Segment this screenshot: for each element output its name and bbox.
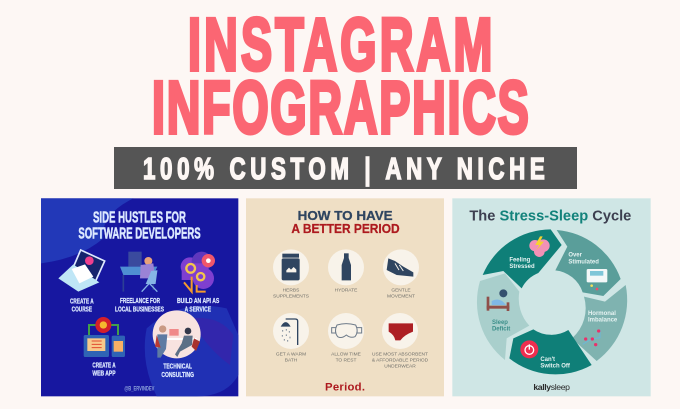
segment: sleep deficit: Deficit xyxy=(492,326,510,332)
labels: first row: FREELANCE FOR xyxy=(120,296,160,305)
labels: GENTLE xyxy=(391,287,411,293)
icon: api cloud xyxy=(181,252,215,292)
brand: kallysleep xyxy=(533,382,570,392)
labels: first row xyxy=(70,296,219,314)
panel: stress-sleep cycle xyxy=(452,198,651,396)
icon circles xyxy=(273,249,419,349)
labels: second row: CONSULTING xyxy=(161,370,194,379)
icon: laptop course xyxy=(58,250,105,292)
labels: first row: COURSE xyxy=(72,305,92,314)
labels xyxy=(273,287,429,369)
labels: second row: TECHNICAL xyxy=(163,362,192,371)
segment: over stimulated: Stimulated xyxy=(568,259,599,265)
brand: Period. xyxy=(325,382,365,394)
labels: first row: CREATE A xyxy=(70,297,94,306)
segment: hormonal imbalance: Imbalance xyxy=(588,318,618,324)
labels: MOVEMENT xyxy=(387,293,415,299)
banner: 100% CUSTOM | ANY NICHE xyxy=(143,151,545,186)
labels: UNDERWEAR xyxy=(384,363,416,369)
icon: underwear xyxy=(389,323,413,340)
icon: web app xyxy=(84,317,125,357)
segment: can't switch off: Switch Off xyxy=(540,363,570,369)
heading: The Stress-Sleep Cycle xyxy=(469,208,631,224)
segment: over stimulated: Over xyxy=(568,253,583,259)
icon: consulting xyxy=(153,310,201,358)
icon: shower xyxy=(281,319,298,345)
labels: HERBS xyxy=(283,287,299,293)
labels: SUPPLEMENTS xyxy=(273,293,309,299)
icon: sneaker xyxy=(387,258,413,277)
handle: @B_ERVINDEV xyxy=(124,386,154,392)
labels: ALLOW TIME xyxy=(331,351,362,357)
icon: supplements jar xyxy=(282,254,300,280)
segment: sleep deficit xyxy=(477,273,529,360)
title: INSTAGRAM xyxy=(188,4,492,87)
labels: TO REST xyxy=(336,357,356,363)
icon: water bottle xyxy=(342,253,351,280)
segment: can't switch off xyxy=(509,329,592,374)
segment: feeling stressed xyxy=(483,229,562,288)
heading: SIDE HUSTLES FOR xyxy=(93,209,186,226)
segment: can't switch off: Can't xyxy=(540,357,555,363)
segment: over stimulated xyxy=(555,230,621,296)
labels: first row: LOCAL BUSINESSES xyxy=(115,304,164,313)
segment: hormonal imbalance xyxy=(572,285,627,361)
heading xyxy=(291,209,400,236)
segment: feeling stressed: Feeling xyxy=(509,258,531,264)
labels: first row: BUILD AN API AS xyxy=(177,296,219,305)
title: INFOGRAPHICS xyxy=(152,67,529,150)
labels: USE MOST ABSORBENT xyxy=(372,351,428,357)
heading: A BETTER PERIOD xyxy=(291,222,400,236)
heading: SOFTWARE DEVELOPERS xyxy=(78,225,201,242)
panel: better period xyxy=(246,198,444,396)
panel: side hustles xyxy=(41,198,238,396)
segment: feeling stressed: Stressed xyxy=(509,264,535,270)
labels: HYDRATE xyxy=(335,287,358,293)
labels: first row: A SERVICE xyxy=(185,304,211,313)
title xyxy=(152,4,529,150)
labels: second row xyxy=(92,361,194,379)
heading: HOW TO HAVE xyxy=(298,209,393,223)
segment: hormonal imbalance: Hormonal xyxy=(588,311,616,317)
labels: second row: CREATE A xyxy=(92,361,116,370)
heading xyxy=(78,209,201,242)
icon: sleep mask xyxy=(332,324,362,338)
icon: freelance desk xyxy=(120,252,157,292)
labels: BATH xyxy=(285,357,298,363)
labels: GET A WARM xyxy=(276,351,306,357)
labels: & AFFORDABLE PERIOD xyxy=(372,357,429,363)
segment: sleep deficit: Sleep xyxy=(492,320,508,326)
labels: second row: WEB APP xyxy=(92,369,116,378)
